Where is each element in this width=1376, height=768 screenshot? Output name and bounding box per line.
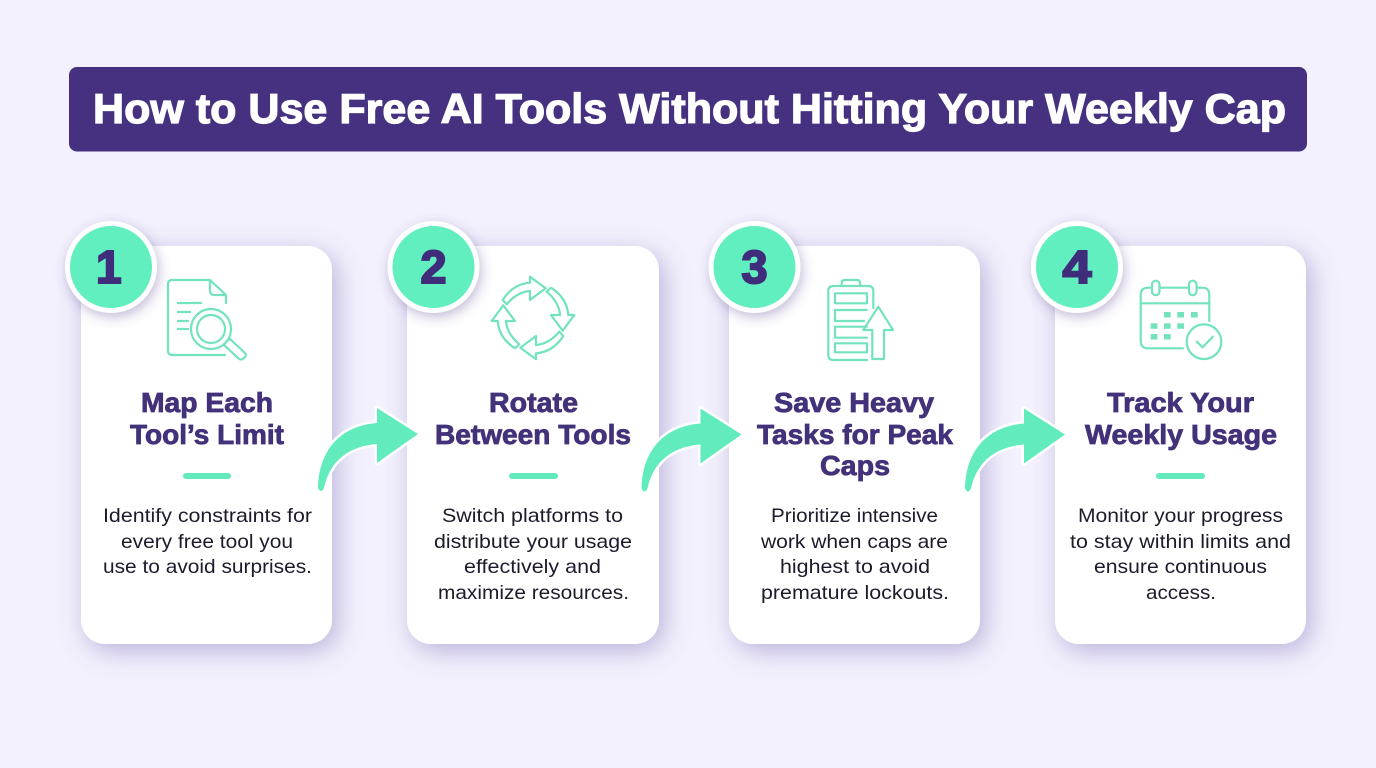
description xyxy=(1070,505,1291,604)
description xyxy=(760,505,949,604)
divider xyxy=(1156,473,1205,479)
heading: Tasks for Peak xyxy=(757,419,953,450)
description: Identify constraints for xyxy=(103,505,313,527)
description: premature lockouts. xyxy=(761,582,949,604)
heading xyxy=(130,387,284,450)
arrow: step 1 to step 2 xyxy=(318,408,418,491)
icon: rotating arrows xyxy=(492,277,574,359)
description: Monitor your progress xyxy=(1078,505,1283,527)
heading: Map Each xyxy=(141,387,273,418)
number badge 3: 3 xyxy=(742,241,768,293)
divider xyxy=(183,473,231,479)
heading xyxy=(1085,387,1277,450)
description: access. xyxy=(1146,582,1216,604)
description: highest to avoid xyxy=(780,556,930,578)
description: distribute your usage xyxy=(434,531,632,553)
heading: Weekly Usage xyxy=(1085,419,1277,450)
heading: Track Your xyxy=(1107,387,1254,418)
description: ensure continuous xyxy=(1094,556,1267,578)
icon: document with magnifier xyxy=(168,280,246,360)
number badge 1: 1 xyxy=(96,241,122,293)
heading xyxy=(435,387,631,450)
number badge 4 xyxy=(1034,224,1120,310)
panel: step 2 rotate between tools xyxy=(390,224,659,644)
description: use to avoid surprises. xyxy=(103,556,312,578)
number badge 1 xyxy=(68,224,154,310)
number badge 2: 2 xyxy=(420,241,446,293)
description: effectively and xyxy=(464,556,601,578)
heading: Save Heavy xyxy=(774,387,934,418)
number badge 4: 4 xyxy=(1062,241,1092,293)
description xyxy=(103,505,313,578)
heading: Tool’s Limit xyxy=(130,419,284,450)
description xyxy=(434,505,632,604)
title banner xyxy=(69,67,1307,152)
icon: battery with up arrow xyxy=(828,280,893,360)
icon: calendar with check xyxy=(1141,281,1221,359)
description: Prioritize intensive xyxy=(771,505,938,527)
number badge 3 xyxy=(711,224,798,310)
divider xyxy=(509,473,558,479)
arrow: step 3 to step 4 xyxy=(965,408,1065,492)
description: to stay within limits and xyxy=(1070,531,1291,553)
panel: step 1 map each tool's limit xyxy=(68,224,332,644)
heading: Caps xyxy=(820,450,890,481)
title: How to Use Free AI Tools Without Hitting Your Weekly Cap xyxy=(93,85,1286,132)
panel: step 3 save heavy tasks xyxy=(711,224,980,644)
heading: Between Tools xyxy=(435,419,631,450)
panel: step 4 track your weekly usage xyxy=(1034,224,1306,644)
heading: Rotate xyxy=(489,387,578,418)
heading xyxy=(757,387,953,481)
description: work when caps are xyxy=(760,531,948,553)
number badge 2 xyxy=(390,224,477,310)
arrow: step 2 to step 3 xyxy=(642,408,742,492)
description: Switch platforms to xyxy=(442,505,623,527)
description: maximize resources. xyxy=(438,582,629,604)
description: every free tool you xyxy=(121,531,293,553)
